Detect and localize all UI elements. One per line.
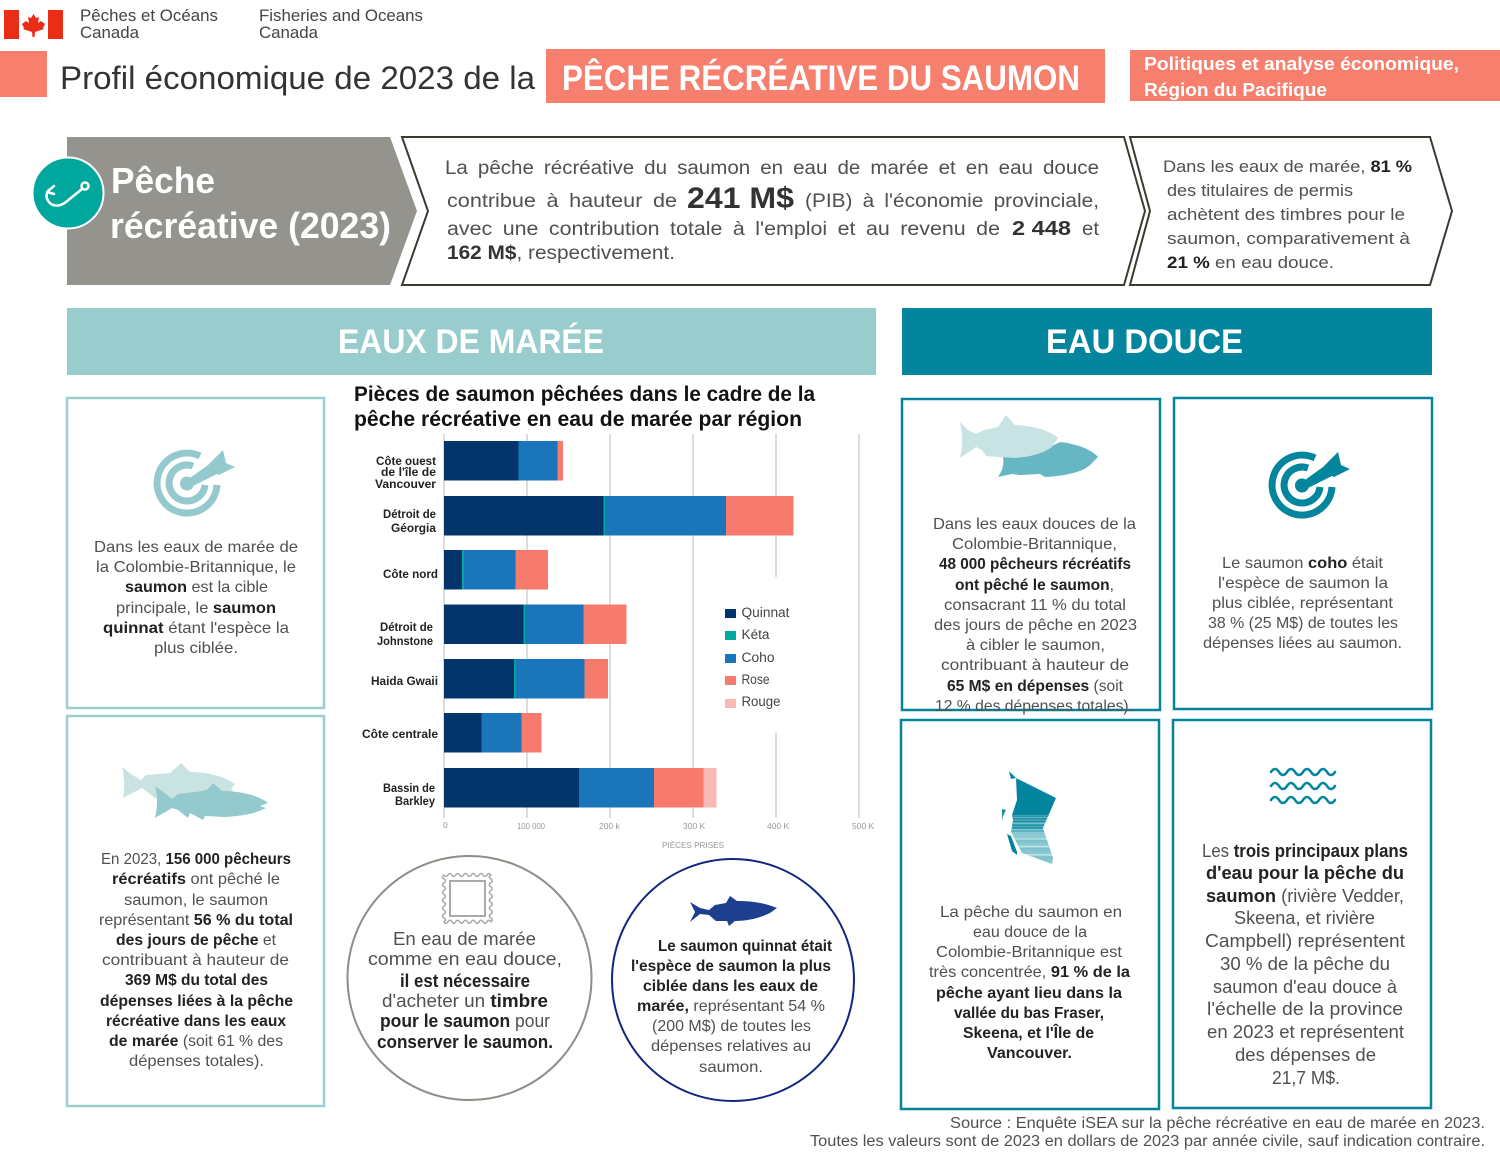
panel: top three rivers: des dépenses de bbox=[1235, 1045, 1376, 1065]
panel: provincial economic contribution bbox=[402, 137, 1145, 285]
panel: tidal water anglers: représentant 56 % du total bbox=[99, 912, 293, 929]
panel: provincial economic contribution: 2 448 bbox=[1012, 218, 1071, 240]
callout: salmon stamp circle bbox=[348, 856, 592, 1100]
axis tick labels: PIÈCES PRISES bbox=[662, 840, 724, 850]
panel: coho target species: l'espèce de saumon la bbox=[1218, 575, 1388, 592]
panel: geographic concentration: Skeena, et l'Île de bbox=[963, 1023, 1094, 1042]
region labels: Johnstone bbox=[377, 636, 433, 648]
panel: coho target species: plus ciblée, représentant bbox=[1212, 595, 1394, 612]
header banner bbox=[0, 49, 1500, 103]
header banner: Profil économique de 2023 de la bbox=[60, 60, 535, 96]
bars: Côte ouest de l'île de Vancouver bbox=[444, 441, 563, 480]
bars: Côte centrale bbox=[444, 713, 542, 752]
callout: chinook salmon circle: dépenses relatives au bbox=[651, 1038, 811, 1055]
panel: top three rivers: en 2023 et représentent bbox=[1207, 1022, 1404, 1042]
callout: chinook salmon circle: l'espèce de saumon la plus bbox=[631, 958, 831, 975]
panel: geographic concentration: pêche ayant lieu dans la bbox=[936, 985, 1122, 1002]
callout: chinook salmon circle: Le saumon quinnat était bbox=[658, 938, 833, 955]
logo: Government of Canada signature: Canada bbox=[259, 23, 319, 42]
axis tick labels: 200 k bbox=[599, 821, 621, 831]
axis tick labels bbox=[443, 820, 875, 850]
panel: salmon stamp purchase rates bbox=[1130, 137, 1452, 285]
heading: Eaux de marée bbox=[67, 308, 876, 375]
panel: coho target species bbox=[1174, 398, 1432, 709]
panel: target species in tidal waters: la Colombie-Britannique, le bbox=[96, 559, 296, 576]
bars: Haida Gwaii bbox=[444, 659, 608, 698]
bars: Bassin de Barkley bbox=[444, 768, 716, 808]
panel: provincial economic contribution: La pêche récréative du saumon en eau de marée et en eau douce bbox=[445, 158, 1099, 179]
panel: freshwater anglers: Colombie-Britannique, bbox=[952, 536, 1117, 553]
header banner: Région du Pacifique bbox=[1144, 80, 1327, 100]
icon: two freshwater salmon bbox=[960, 415, 1098, 477]
panel: target species in tidal waters: saumon est la cible bbox=[125, 579, 268, 596]
callout: chinook salmon circle: ciblée dans les eaux de bbox=[643, 978, 818, 995]
chart title: pêche récréative en eau de marée par région bbox=[354, 408, 802, 431]
panel: tidal water anglers: récréatifs ont pêché le bbox=[112, 871, 280, 888]
source note: Toutes les valeurs sont de 2023 en dollars de 2023 par année civile, sauf indication contraire. bbox=[810, 1133, 1485, 1150]
panel: Pêche récréative (2023) banner bbox=[32, 137, 417, 285]
region labels: de l'île de bbox=[381, 467, 436, 479]
panel: top three rivers: d'eau pour la pêche du bbox=[1206, 863, 1404, 883]
panel: salmon stamp purchase rates: des titulaires de permis bbox=[1167, 181, 1353, 200]
panel: tidal water anglers: saumon, le saumon bbox=[124, 892, 268, 909]
panel: freshwater anglers: ont pêché le saumon, bbox=[955, 577, 1114, 594]
icon: target with arrow bbox=[157, 450, 235, 513]
panel: geographic concentration: La pêche du saumon en bbox=[940, 904, 1122, 921]
region labels bbox=[362, 456, 438, 808]
panel: top three rivers: Campbell) représentent bbox=[1205, 931, 1405, 951]
panel: freshwater anglers: 65 M$ en dépenses (soit bbox=[947, 678, 1124, 695]
panel: top three rivers: Les trois principaux plans bbox=[1202, 841, 1408, 861]
heading: Eau douce bbox=[902, 308, 1432, 375]
panel: provincial economic contribution: (PIB) à l'économie provinciale, bbox=[805, 191, 1099, 212]
callout: salmon stamp circle: En eau de marée bbox=[393, 929, 536, 949]
panel: target species in tidal waters bbox=[67, 398, 324, 708]
panel: freshwater anglers: Dans les eaux douces de la bbox=[933, 516, 1136, 533]
panel: target species in tidal waters: Dans les eaux de marée de bbox=[94, 539, 298, 556]
panel: tidal water anglers: de marée (soit 61 % des bbox=[109, 1033, 283, 1050]
callout: salmon stamp circle: d'acheter un timbre bbox=[382, 991, 548, 1011]
panel: top three rivers bbox=[1173, 720, 1431, 1108]
panel: freshwater anglers: 12 % des dépenses totales). bbox=[935, 698, 1133, 715]
icon: water waves bbox=[1271, 769, 1335, 803]
panel: tidal water anglers: des jours de pêche et bbox=[116, 932, 277, 949]
panel: target species in tidal waters: plus ciblée. bbox=[154, 640, 238, 657]
heading: Eaux de marée: EAUX DE MARÉE bbox=[338, 323, 604, 361]
callout: salmon stamp circle: il est nécessaire bbox=[400, 971, 530, 991]
panel: top three rivers: l'échelle de la province bbox=[1207, 999, 1403, 1019]
panel: provincial economic contribution: 162 M$, respectivement. bbox=[447, 242, 675, 264]
panel: top three rivers: saumon (rivière Vedder, bbox=[1206, 886, 1404, 906]
panel: geographic concentration: eau douce de la bbox=[973, 924, 1087, 941]
axis tick labels: 300 K bbox=[683, 821, 706, 831]
panel: salmon stamp purchase rates: Dans les eaux de marée, 81 % bbox=[1163, 157, 1412, 176]
panel: tidal water anglers: 369 M$ du total des bbox=[125, 972, 268, 989]
region labels: Détroit de bbox=[380, 622, 433, 634]
region labels: Bassin de bbox=[383, 783, 435, 795]
axis tick labels: 400 K bbox=[767, 821, 790, 831]
panel: freshwater anglers: des jours de pêche en 2023 bbox=[934, 617, 1137, 634]
heading: Eau douce: EAU DOUCE bbox=[1046, 323, 1243, 361]
panel: tidal water anglers: En 2023, 156 000 pêcheurs bbox=[101, 851, 291, 868]
panel: freshwater anglers: contribuant à hauteur de bbox=[941, 657, 1129, 674]
panel: salmon stamp purchase rates: achètent des timbres pour le bbox=[1167, 205, 1405, 224]
region labels: Géorgia bbox=[391, 523, 437, 535]
panel: geographic concentration: vallée du bas Fraser, bbox=[954, 1005, 1104, 1022]
callout: chinook salmon circle bbox=[612, 859, 854, 1101]
icon: navy salmon bbox=[690, 896, 777, 926]
panel: freshwater anglers: à cibler le saumon, bbox=[966, 637, 1105, 654]
icon: Canadian flag bbox=[4, 10, 63, 39]
panel: top three rivers: saumon d'eau douce à bbox=[1213, 977, 1398, 997]
panel: Pêche récréative (2023) banner: récréative (2023) bbox=[110, 205, 391, 246]
panel: freshwater anglers: consacrant 11 % du total bbox=[944, 597, 1126, 614]
panel: top three rivers: 30 % de la pêche du bbox=[1220, 954, 1390, 974]
panel: freshwater anglers: 48 000 pêcheurs récréatifs bbox=[939, 556, 1131, 573]
legend: Quinnat bbox=[742, 605, 790, 620]
axis tick labels: 500 K bbox=[852, 821, 875, 831]
icon: target with arrow bbox=[1272, 452, 1350, 515]
panel: geographic concentration: Vancouver. bbox=[987, 1045, 1072, 1062]
panel: provincial economic contribution: 241 M$ bbox=[687, 182, 794, 215]
panel: coho target species: dépenses liées au saumon. bbox=[1203, 635, 1402, 652]
panel: provincial economic contribution: avec une contribution totale à l'emploi et au revenu de bbox=[447, 219, 1000, 240]
panel: Pêche récréative (2023) banner: Pêche bbox=[111, 160, 215, 201]
panel: coho target species: 38 % (25 M$) de toutes les bbox=[1208, 615, 1398, 632]
panel: geographic concentration: Colombie-Britannique est bbox=[936, 944, 1123, 961]
region labels: Haida Gwaii bbox=[371, 676, 438, 688]
panel: tidal water anglers bbox=[67, 716, 324, 1106]
panel: tidal water anglers: dépenses totales). bbox=[129, 1053, 264, 1070]
region labels: Côte nord bbox=[383, 569, 438, 581]
legend: Coho bbox=[742, 650, 774, 665]
callout: chinook salmon circle: (200 M$) de toutes les bbox=[652, 1018, 811, 1035]
bars: Détroit de Géorgia bbox=[444, 496, 794, 536]
header banner: PÊCHE RÉCRÉATIVE DU SAUMON bbox=[562, 58, 1080, 98]
callout: chinook salmon circle: marée, représentant 54 % bbox=[637, 998, 825, 1015]
callout: salmon stamp circle: comme en eau douce, bbox=[368, 949, 562, 969]
bars: Côte nord bbox=[444, 550, 548, 590]
bars: Détroit de Johnstone bbox=[444, 604, 626, 644]
bar chart: salmon pieces caught by region bbox=[362, 434, 875, 850]
logo: Government of Canada signature: Canada bbox=[80, 23, 140, 42]
logo: Government of Canada signature: Fisheries and Oceans bbox=[259, 6, 423, 25]
logo: Government of Canada signature: Pêches et Océans bbox=[80, 6, 218, 25]
icon: two salmon bbox=[122, 763, 268, 820]
panel: tidal water anglers: dépenses liées à la pêche bbox=[100, 993, 293, 1010]
legend bbox=[725, 605, 790, 709]
source note bbox=[810, 1115, 1485, 1150]
source note: Source : Enquête iSEA sur la pêche récréative en eau de marée en 2023. bbox=[950, 1115, 1485, 1132]
chart title bbox=[354, 383, 815, 431]
panel: provincial economic contribution: et bbox=[1082, 219, 1100, 240]
callout: salmon stamp circle: conserver le saumon. bbox=[377, 1032, 553, 1052]
region labels: Côte centrale bbox=[362, 729, 438, 741]
region labels: Détroit de bbox=[383, 509, 436, 521]
axis tick labels: 100 000 bbox=[517, 821, 545, 831]
icon: stamp bbox=[442, 874, 492, 923]
callout: chinook salmon circle: saumon. bbox=[699, 1059, 763, 1076]
panel: top three rivers: 21,7 M$. bbox=[1272, 1068, 1340, 1088]
axis tick labels: 0 bbox=[443, 820, 448, 830]
legend: Kéta bbox=[742, 627, 770, 642]
chart title: Pièces de saumon pêchées dans le cadre de la bbox=[354, 383, 815, 406]
panel: top three rivers: Skeena, et rivière bbox=[1234, 908, 1375, 928]
icon: map of British Columbia bbox=[1002, 771, 1056, 864]
panel: provincial economic contribution: contribue à hauteur de bbox=[447, 191, 677, 212]
panel: coho target species: Le saumon coho était bbox=[1222, 555, 1384, 572]
panel: geographic concentration: très concentrée, 91 % de la bbox=[929, 964, 1130, 981]
logo: Government of Canada signature bbox=[4, 6, 423, 42]
legend: Rouge bbox=[742, 694, 780, 709]
panel: salmon stamp purchase rates: saumon, comparativement à bbox=[1167, 229, 1411, 248]
panel: salmon stamp purchase rates: 21 % en eau douce. bbox=[1167, 253, 1334, 272]
panel: target species in tidal waters: principale, le saumon bbox=[116, 600, 276, 617]
icon: fishing hook bbox=[32, 158, 104, 228]
region labels: Côte ouest bbox=[376, 456, 436, 468]
panel: tidal water anglers: contribuant à hauteur de bbox=[102, 952, 289, 969]
region labels: Barkley bbox=[395, 796, 436, 808]
panel: freshwater anglers bbox=[902, 399, 1160, 715]
panel: tidal water anglers: récréative dans les eaux bbox=[106, 1013, 286, 1030]
region labels: Vancouver bbox=[375, 479, 437, 491]
callout: salmon stamp circle: pour le saumon pour bbox=[380, 1011, 550, 1031]
legend: Rose bbox=[742, 672, 770, 687]
panel: target species in tidal waters: quinnat étant l'espèce la bbox=[103, 620, 289, 637]
panel: geographic concentration bbox=[901, 720, 1159, 1109]
header banner: Politiques et analyse économique, bbox=[1144, 54, 1459, 74]
